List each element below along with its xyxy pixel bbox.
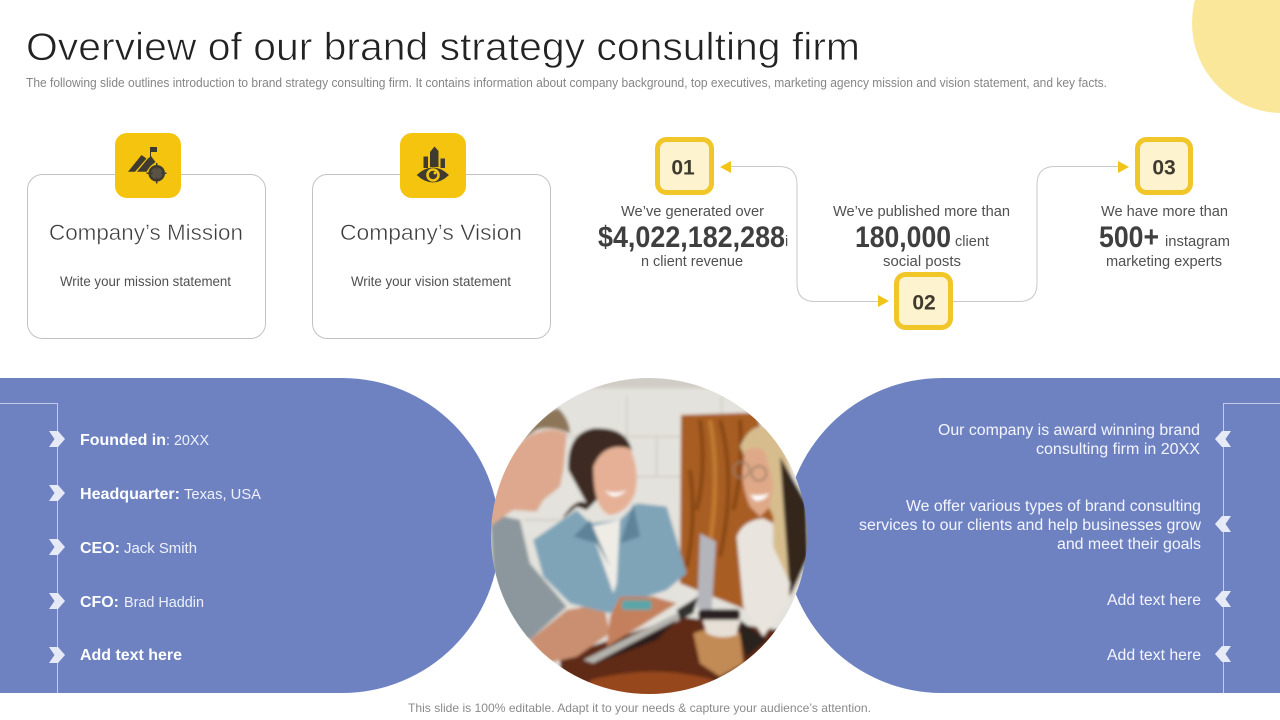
step 03 [1099,140,1230,270]
connector arrows between steps [720,161,1129,307]
stat text 03: marketing experts [1106,254,1222,270]
highlight: services [859,498,1231,553]
list item: CFO: CFO: [80,594,119,611]
list item: add text: Add text here [80,647,182,664]
stat text 02 [833,204,1010,270]
table [558,614,778,684]
footer note: This slide is 100% editable. Adapt it to your needs & capture your audience’s attention. [408,701,871,715]
highlight: award winning: consulting firm in 20XX [1036,441,1201,458]
list item: headquarter: Texas, USA [184,486,261,503]
icon: city eye [400,133,466,198]
decorative yellow corner circle [1192,0,1280,113]
highlight: award winning: Our company is award winning brand [938,422,1200,439]
stat text 03: instagram [1165,234,1230,250]
coffee cup and hand [693,627,743,677]
highlight: award winning [938,422,1231,458]
list item: headquarter: Headquarter: [80,486,180,503]
stat text 01: i [785,234,788,250]
panel: company's vision [312,133,550,338]
stat text 01: n client revenue [641,254,743,270]
right woman [740,426,807,597]
highlight: services: We offer various types of brand consulting [906,498,1201,515]
list item: founded in [49,431,209,449]
number badge 02 [896,274,950,328]
panel: company's mission [28,133,266,338]
wall [491,388,807,668]
stat text 02: We’ve published more than [833,204,1010,220]
panel: company highlights [784,378,1280,693]
stat text 01 [598,204,788,270]
number badge 01: 01 [671,156,695,180]
photo: three colleagues around a table [491,378,807,694]
stat text 02: 180,000 [855,221,951,254]
text block: Write your vision statement [351,273,511,289]
text block: Write your mission statement [60,273,231,289]
list item: CFO: Brad Haddin [124,594,204,611]
number badge 02: 02 [912,292,936,314]
list item: CFO [49,593,204,611]
subtitle: The following slide outlines introduction to brand strategy consulting firm. It contains information about company background, top executives, marketing agency mission and vision statement, and key facts. [26,76,1107,90]
hands and phone [607,597,677,647]
heading: Company’s Mission [49,220,243,245]
highlight: services: services to our clients and help businesses grow [859,517,1202,534]
list item: founded in: Founded in [80,432,166,449]
list item: CEO: CEO: [80,540,120,557]
stat text 01: We’ve generated over [621,204,764,220]
number badge 01 [658,140,712,192]
list item: headquarter [49,485,261,503]
stat text 03: 500+ [1099,221,1159,254]
man arm [530,603,610,663]
highlight: add text 2: Add text here [1107,647,1201,664]
icon: mountain flag and target [115,133,181,198]
wood door [680,413,780,610]
title: Overview of our brand strategy consulting firm [26,26,860,69]
step 02 [833,204,1010,328]
list item: founded in: : 20XX [166,432,209,449]
heading: Company’s Vision [340,220,522,245]
man [490,513,567,640]
stat text 02: client [955,234,989,250]
highlight: services: and meet their goals [1057,536,1201,553]
stat text 03 [1099,204,1230,270]
number badge 03: 03 [1152,156,1176,180]
stat text 01: $4,022,182,288 [598,221,785,254]
stat text 03: We have more than [1101,204,1228,220]
panel: company facts [0,378,500,693]
highlight: add text 1: Add text here [1107,592,1201,609]
step 01 [598,140,788,270]
list item: CEO: Jack Smith [124,540,197,557]
stat text 02: social posts [883,254,961,270]
laptop [697,533,716,610]
list item: CEO [49,539,197,557]
center woman [563,428,632,518]
